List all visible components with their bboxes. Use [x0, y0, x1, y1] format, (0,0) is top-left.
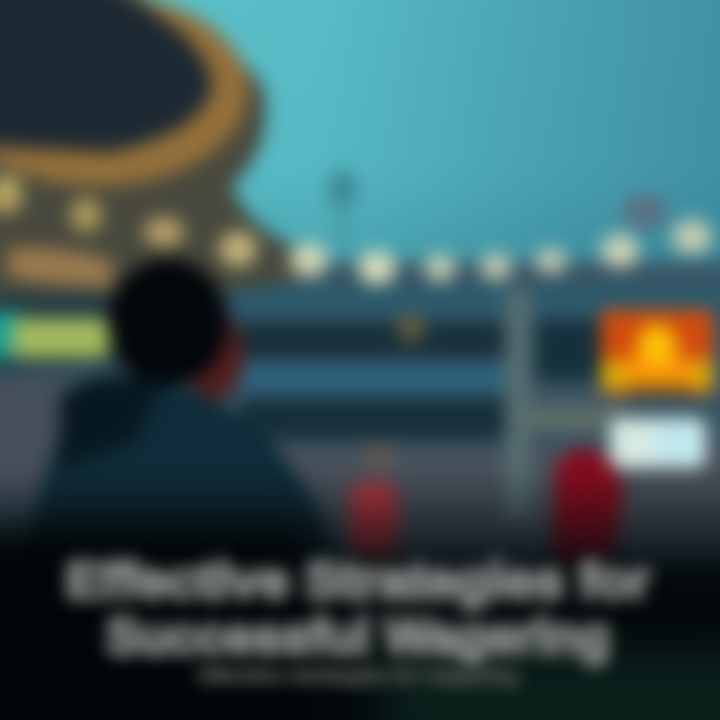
red-shirted figure left [350, 440, 398, 557]
white lit screen [610, 418, 706, 468]
dark bottom gradient [0, 470, 720, 720]
stadium stands [0, 262, 720, 562]
green lit sign [0, 312, 110, 358]
foreground silhouette of spectator [20, 258, 345, 580]
roof canopy of stadium [0, 0, 300, 372]
red-shirted figure right [552, 448, 624, 560]
small amber dot on stand [397, 313, 425, 343]
amber sign under canopy [8, 248, 112, 287]
title [66, 552, 650, 666]
orange and yellow scoreboard [601, 310, 713, 394]
sky background [0, 0, 720, 330]
faint subtitle: Effective strategies for wagering [198, 665, 518, 687]
title: Successful Wagering [106, 608, 610, 666]
title: Effective Strategies for [66, 552, 650, 610]
distant light masts [328, 170, 668, 250]
string of stadium lights [0, 174, 712, 285]
